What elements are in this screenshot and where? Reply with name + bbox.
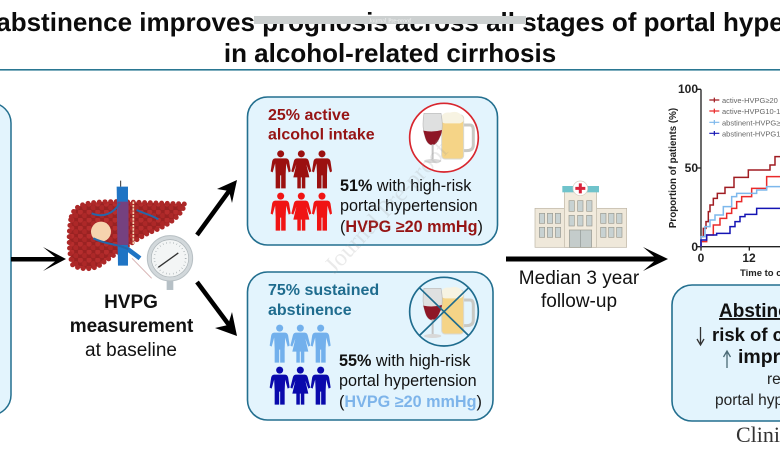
chart axis labels: 50	[685, 161, 698, 175]
tumour nodule	[91, 222, 111, 242]
heading	[268, 282, 379, 319]
curve: active HVPG10-19	[701, 177, 780, 247]
chart axis labels: Proportion of patients (%)	[668, 108, 679, 228]
icon: down arrow	[697, 327, 704, 345]
statistic text: (HVPG ≥20 mmHg)	[340, 218, 483, 236]
statistic text: portal hypertension	[339, 372, 477, 390]
panel: sustained abstinence	[248, 272, 493, 420]
icon: wine and beer in red circle	[410, 103, 478, 172]
watermark: Journal Pre-proof	[320, 138, 454, 279]
chart axis labels: 0	[698, 251, 705, 265]
panel: conclusion	[672, 285, 780, 421]
statistic text: 55% with high-risk	[339, 352, 471, 370]
statistic text: 51% with high-risk	[340, 177, 472, 195]
chart axis labels: 100	[678, 82, 698, 96]
title	[0, 7, 780, 68]
HVPG label	[70, 292, 194, 361]
HVPG label: at baseline	[85, 340, 177, 361]
title rule	[0, 69, 780, 71]
journal pre-proof banner	[254, 16, 526, 24]
icon: hospital	[535, 181, 627, 247]
legend lines	[709, 98, 719, 102]
gauge	[167, 280, 173, 290]
arrow: cohort to liver	[11, 247, 66, 271]
panel: patient cohort (cropped)	[0, 103, 11, 415]
title: in alcohol-related cirrhosis	[224, 38, 556, 68]
chart axis labels: 12	[742, 251, 756, 265]
curve: active HVPG≥20	[701, 157, 780, 247]
catheter line	[132, 258, 152, 278]
heading: alcohol intake	[268, 126, 375, 144]
falciform ligament	[131, 202, 136, 244]
statistic text	[340, 177, 483, 236]
HVPG label: measurement	[70, 316, 194, 337]
arrow: to active intake	[197, 180, 237, 235]
vena cava	[117, 187, 128, 266]
chart legend labels	[722, 96, 780, 138]
icon: crossed-out wine and beer	[410, 277, 478, 346]
chart legend labels: active-HVPG≥20	[722, 96, 778, 105]
follow-up label: Median 3 year	[519, 268, 640, 289]
icon: up arrow	[724, 351, 730, 368]
arrow: follow-up	[506, 247, 668, 271]
chart axis labels	[668, 82, 780, 279]
liver	[69, 202, 185, 269]
icon: liver with pressure gauge	[69, 181, 193, 290]
follow-up label: follow-up	[541, 291, 617, 312]
journal pre-proof banner: Journal Pre-proof	[369, 18, 411, 24]
heading	[268, 107, 375, 144]
heading: 75% sustained	[268, 282, 379, 299]
people: 25% active group	[271, 150, 332, 231]
statistic text: (HVPG ≥20 mmHg)	[339, 393, 482, 411]
panel: active alcohol intake	[248, 97, 498, 245]
chart: cumulative incidence	[697, 89, 780, 251]
follow-up label	[519, 268, 640, 312]
HVPG label: HVPG	[104, 292, 158, 313]
statistic text: portal hypertension	[340, 197, 478, 215]
heading: abstinence	[268, 302, 352, 319]
chart axis labels: 0	[691, 240, 698, 254]
curve: abstinent HVPG10-19	[701, 208, 780, 247]
statistic text	[339, 352, 482, 411]
curve: abstinent HVPG≥20	[701, 187, 780, 247]
people: 75% abstinent group	[270, 325, 331, 405]
arrow: to abstinence	[197, 282, 237, 336]
axes	[697, 89, 780, 251]
heading: 25% active	[268, 107, 350, 124]
